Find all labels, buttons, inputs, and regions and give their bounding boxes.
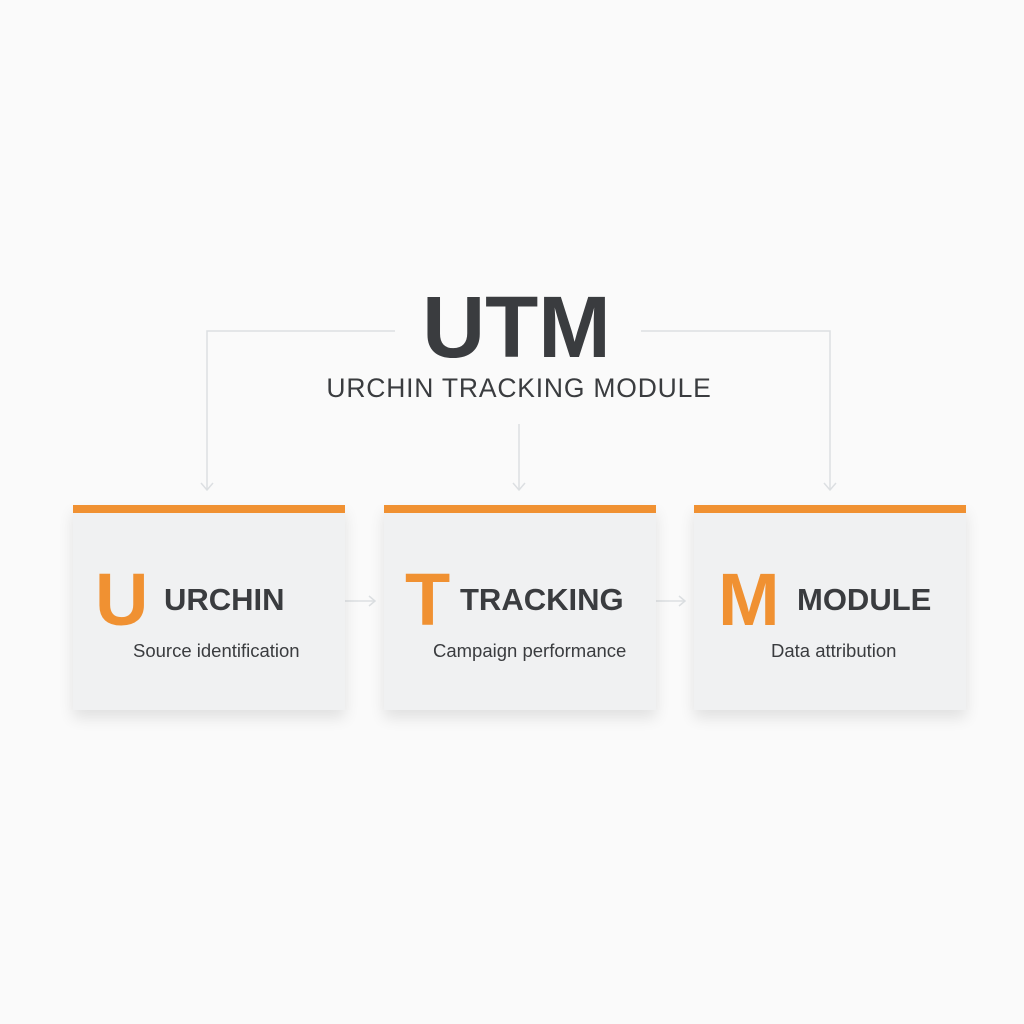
word urchin: URCHIN	[164, 582, 285, 617]
letter U: U	[95, 558, 148, 641]
panel: tracking	[384, 505, 656, 710]
panel: module	[694, 505, 966, 710]
title: UTM	[422, 279, 611, 376]
text: source identification: Source identification	[133, 640, 300, 661]
letter M: M	[718, 558, 780, 641]
text: data attribution: Data attribution	[771, 640, 896, 661]
letter T: T	[405, 558, 450, 641]
word module: MODULE	[797, 582, 931, 617]
word tracking: TRACKING	[460, 582, 624, 617]
text: campaign performance: Campaign performance	[433, 640, 626, 661]
subtitle: URCHIN TRACKING MODULE	[326, 373, 712, 403]
panel: urchin	[73, 505, 345, 710]
